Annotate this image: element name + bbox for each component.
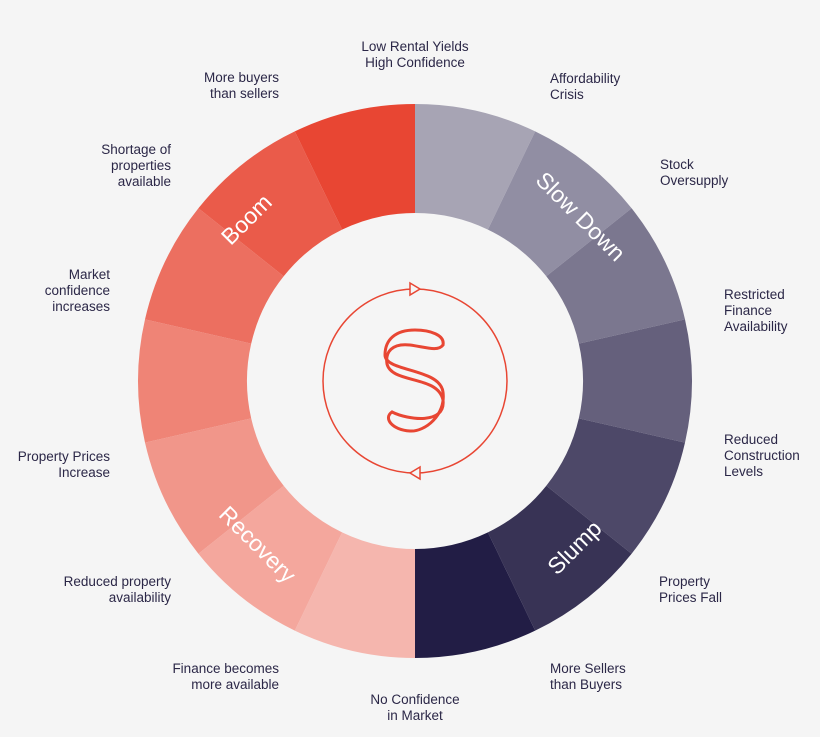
phase labels: Slump <box>542 515 607 580</box>
outer text labels: Crisis <box>550 87 584 102</box>
outer text labels: availability <box>109 590 171 605</box>
outer text labels: confidence <box>45 283 110 298</box>
outer text labels: Finance <box>724 303 772 318</box>
outer text labels: Stock <box>660 157 694 172</box>
outer text labels: More Sellers <box>550 661 626 676</box>
outer text labels: Restricted <box>724 287 785 302</box>
outer text labels: High Confidence <box>365 55 465 70</box>
outer text labels: Reduced property <box>64 574 171 589</box>
phase labels: Recovery <box>214 501 302 588</box>
outer text labels: Increase <box>58 465 110 480</box>
outer text labels: Construction <box>724 448 800 463</box>
outer text labels: Shortage of <box>101 142 171 157</box>
outer text labels: in Market <box>387 708 443 723</box>
outer text labels: Affordability <box>550 71 621 86</box>
outer text labels: Property <box>659 574 710 589</box>
outer text labels: Finance becomes <box>172 661 279 676</box>
outer text labels: Levels <box>724 464 763 479</box>
outer text labels: No Confidence <box>370 692 460 707</box>
outer text labels: available <box>118 174 171 189</box>
outer text labels: than Buyers <box>550 677 622 692</box>
outer text labels: properties <box>111 158 171 173</box>
phase labels: Boom <box>216 189 277 250</box>
outer text labels: than sellers <box>210 86 279 101</box>
outer text labels: Reduced <box>724 432 778 447</box>
outer text labels: Oversupply <box>660 173 729 188</box>
center icon: cycle with S <box>323 283 507 479</box>
outer text labels: Property Prices <box>18 449 110 464</box>
outer text labels: Availability <box>724 319 788 334</box>
outer text labels: More buyers <box>204 70 279 85</box>
outer text labels: increases <box>52 299 110 314</box>
outer text labels: Prices Fall <box>659 590 722 605</box>
outer text labels: more available <box>191 677 279 692</box>
outer text labels: Market <box>69 267 110 282</box>
phase labels: Slow Down <box>531 166 631 266</box>
phase labels <box>214 166 631 588</box>
outer text labels: Low Rental Yields <box>361 39 469 54</box>
donut chart: property cycle <box>138 104 692 658</box>
